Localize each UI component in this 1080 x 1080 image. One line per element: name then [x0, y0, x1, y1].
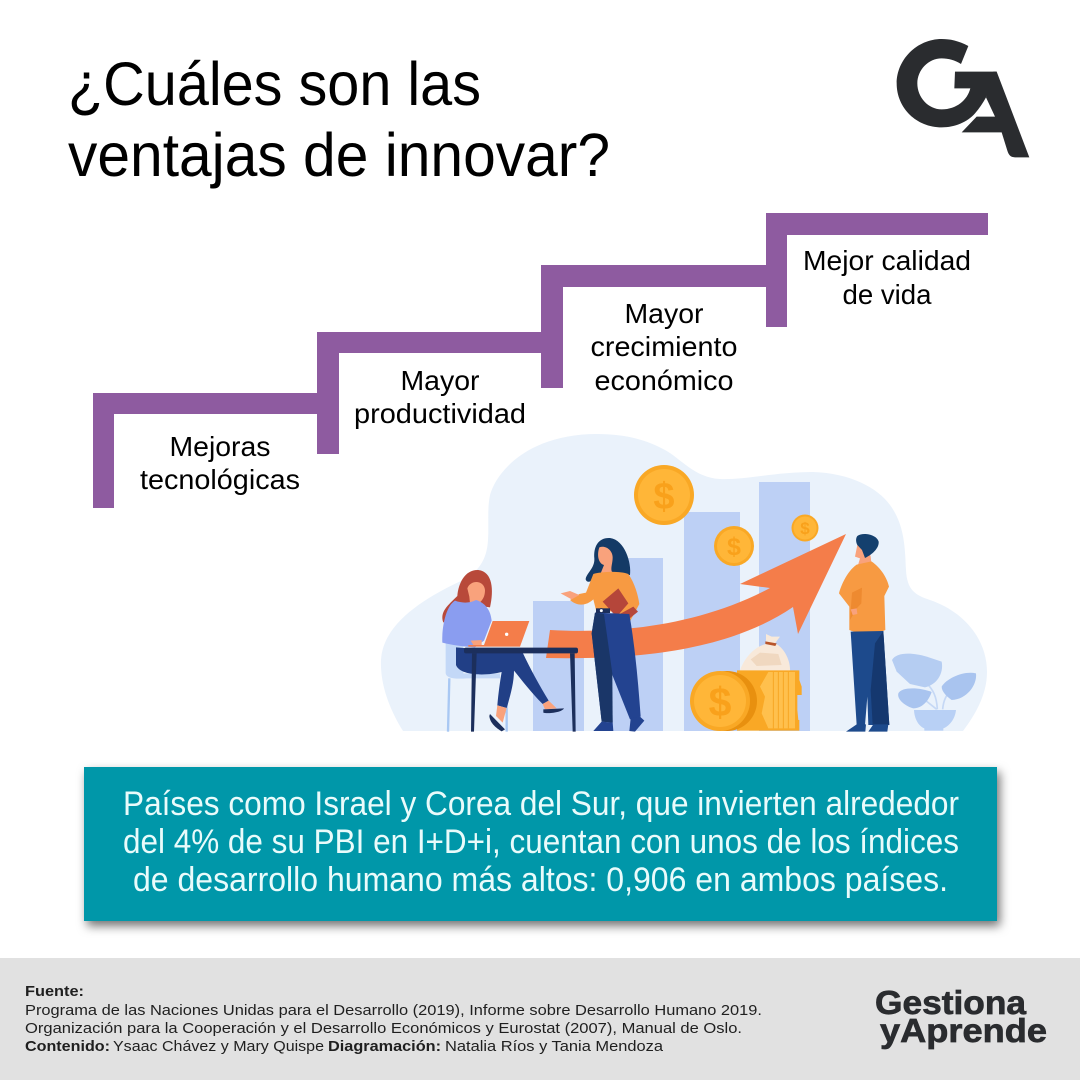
- coin stack: [737, 670, 802, 731]
- title: ventajas de innovar?: [68, 121, 610, 189]
- sources and credits: Programa de las Naciones Unidas para el Desarrollo (2019), Informe sobre Desarrollo Humano 2019.: [25, 1002, 762, 1019]
- growth arrow: [546, 534, 846, 658]
- step 3 label: Mayor: [624, 298, 704, 329]
- coin: large front: $: [709, 679, 732, 725]
- step 3 label: crecimiento: [590, 331, 738, 362]
- step 2 label: [354, 365, 526, 429]
- coin: top: [634, 465, 694, 525]
- staircase: four purple steps: [93, 213, 988, 508]
- sources and credits: Diagramación:: [328, 1038, 441, 1055]
- footer panel: [0, 958, 1080, 1080]
- illustration: team and growth: [381, 434, 987, 732]
- title: [68, 50, 610, 189]
- wordmark: Gestiona y Aprende: [875, 984, 1047, 1049]
- wordmark: Gestiona y Aprende: yAprende: [880, 1012, 1047, 1049]
- potted plant: [892, 654, 976, 731]
- callout: teal statistic box: del 4% de su PBI en I+D+i, cuentan con unos de los índices: [123, 823, 959, 861]
- step 4 label: Mejor calidad: [803, 245, 971, 276]
- step 1 label: Mejoras: [170, 431, 270, 462]
- coin: top: $: [653, 476, 675, 518]
- callout: teal statistic box: [84, 767, 997, 921]
- logo: GA: [897, 39, 1029, 157]
- woman seated with laptop: [442, 570, 578, 732]
- callout: teal statistic box: Países como Israel y Corea del Sur, que invierten alrededor: [123, 785, 959, 823]
- money bag: [740, 634, 790, 671]
- sources and credits: Ysaac Chávez y Mary Quispe: [113, 1038, 324, 1055]
- step 2 label: Mayor: [400, 365, 480, 396]
- step 1 label: tecnológicas: [140, 464, 300, 495]
- coin: small: [792, 514, 818, 542]
- bar chart: [533, 482, 810, 731]
- step 1 label: [140, 431, 300, 495]
- sources and credits: Contenido:: [25, 1038, 110, 1055]
- step 4 label: [803, 245, 971, 310]
- callout: teal statistic box: de desarrollo humano más altos: 0,906 en ambos países.: [133, 861, 948, 899]
- coin: middle: [714, 526, 754, 566]
- background blob: [381, 434, 987, 731]
- step 2 label: productividad: [354, 398, 526, 429]
- sources and credits: Organización para la Cooperación y el Desarrollo Económicos y Eurostat (2007), Manual de Oslo.: [25, 1020, 742, 1037]
- sources and credits: Natalia Ríos y Tania Mendoza: [445, 1038, 664, 1055]
- sources and credits: Fuente:: [25, 983, 84, 1000]
- woman standing with folder: [561, 538, 644, 732]
- man looking at arrow: [839, 534, 889, 732]
- step 3 label: [590, 298, 738, 396]
- step 3 label: económico: [594, 365, 734, 396]
- wordmark: Gestiona y Aprende: Gestiona: [875, 984, 1027, 1021]
- title: ¿Cuáles son las: [68, 50, 481, 118]
- coin: middle: $: [727, 533, 741, 561]
- step 4 label: de vida: [842, 279, 932, 310]
- coin: small: $: [800, 519, 810, 538]
- coin: large front: [690, 671, 757, 731]
- sources and credits: [25, 983, 762, 1055]
